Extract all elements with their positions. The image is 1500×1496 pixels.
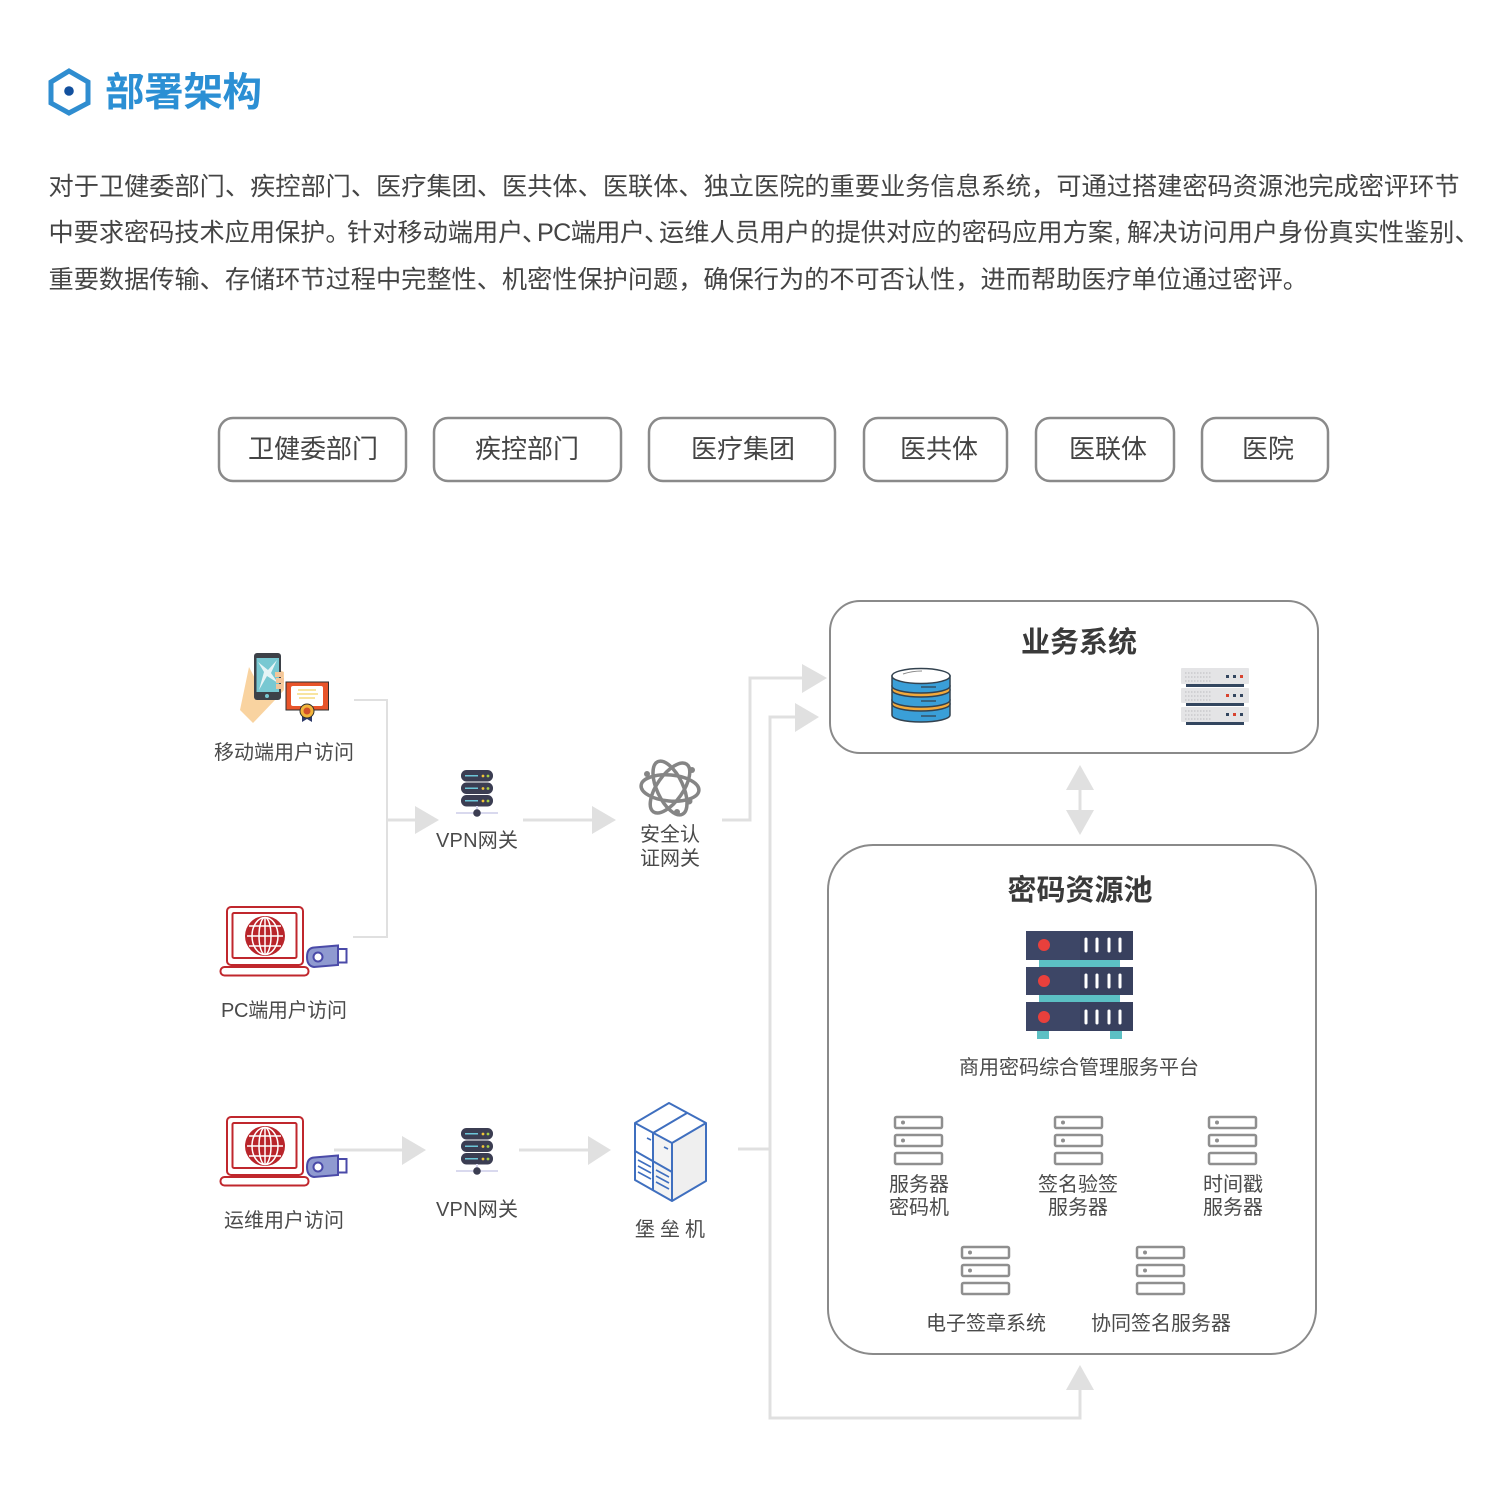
- intro text block: 针对移动端用户: [347, 219, 523, 247]
- label: timestamp server: 服务器: [1203, 1196, 1263, 1219]
- label: signature verification server: 服务器: [1048, 1196, 1108, 1219]
- icon: server crypto machine: [895, 1117, 942, 1164]
- label: VPN gateway bottom: VPN网关: [436, 1198, 518, 1221]
- heading: business system: 业务系统: [1021, 626, 1137, 659]
- tag: 医院: [1202, 418, 1328, 481]
- icon: electronic seal system: [962, 1247, 1009, 1294]
- panel: crypto resource pool: [828, 845, 1316, 1354]
- label: signature verification server: [1038, 1173, 1118, 1219]
- label: VPN gateway top: VPN网关: [436, 829, 518, 852]
- intro text block: 运维人员用户的提供对应的密码应用方案: [659, 219, 1113, 247]
- intro text block: [48, 173, 1480, 294]
- icon: rack server: [1181, 668, 1249, 725]
- tag: 卫健委部门: 卫健委部门: [248, 434, 378, 464]
- intro text block: 、: [644, 219, 669, 247]
- label: security authentication gateway: [640, 823, 700, 870]
- intro text block: PC端用户: [537, 219, 645, 247]
- tag: 医共体: [864, 418, 1007, 481]
- icon: PC user laptop: [220, 907, 346, 976]
- tag: 卫健委部门: [219, 418, 406, 481]
- icon: security authentication gateway atom: [640, 756, 700, 820]
- tag: 医共体: 医共体: [900, 434, 978, 464]
- panel: business system: [830, 601, 1318, 753]
- label: mobile user access: 移动端用户访问: [214, 741, 354, 764]
- intro text block: 解决访问用户身份真实性鉴别、: [1127, 219, 1480, 247]
- icon: bastion host: [635, 1103, 706, 1201]
- label: timestamp server: 时间戳: [1203, 1173, 1263, 1196]
- tag: 医疗集团: 医疗集团: [691, 434, 795, 464]
- tag: 疾控部门: [434, 418, 621, 481]
- label: management platform: 商用密码综合管理服务平台: [959, 1056, 1199, 1079]
- icon: VPN gateway top: [456, 770, 498, 817]
- intro text block: ,: [1114, 219, 1121, 247]
- heading: crypto resource pool: 密码资源池: [1007, 874, 1153, 907]
- icon: database: [892, 668, 950, 722]
- label: security authentication gateway: 证网关: [640, 847, 700, 870]
- arrow: bastion host to business system and crypto pool: [738, 703, 1094, 1418]
- tag: 医院: 医院: [1242, 434, 1294, 464]
- label: server crypto machine: 服务器: [889, 1173, 949, 1196]
- icon: collaborative signature server: [1137, 1247, 1184, 1294]
- icon: ops user laptop: [220, 1117, 346, 1186]
- icon: mobile user: [240, 653, 328, 723]
- icon: signature verification server: [1055, 1117, 1102, 1164]
- arrow: user access to VPN gateway: [353, 700, 439, 937]
- arrow: ops user to VPN gateway: [334, 1136, 426, 1165]
- label: timestamp server: [1203, 1173, 1263, 1219]
- tag: 医联体: [1036, 418, 1174, 481]
- intro text block: 中要求密码技术应用保护。: [48, 219, 350, 247]
- intro text block: 重要数据传输、存储环节过程中完整性、机密性保护问题，确保行为的不可否认性，进而帮助医疗单位通过密评。: [48, 266, 1308, 294]
- arrow: VPN gateway to auth gateway: [523, 806, 616, 834]
- label: bastion host: 堡垒机: [635, 1218, 705, 1241]
- label: collaborative signature server: 协同签名服务器: [1091, 1312, 1231, 1335]
- label: security authentication gateway: 安全认: [640, 823, 700, 846]
- tag: 疾控部门: 疾控部门: [475, 434, 579, 464]
- arrow: auth gateway to business system: [722, 664, 827, 820]
- label: server crypto machine: [889, 1173, 949, 1219]
- tag: 医联体: 医联体: [1069, 434, 1147, 464]
- arrow: bidirectional between systems: [1066, 765, 1094, 835]
- tag: 医疗集团: [649, 418, 835, 481]
- intro text block: 对于卫健委部门、疾控部门、医疗集团、医共体、医联体、独立医院的重要业务信息系统，可通过搭建密码资源池完成密评环节: [48, 173, 1460, 201]
- intro text block: 、: [522, 219, 547, 247]
- label: ops user access: 运维用户访问: [224, 1209, 344, 1232]
- section icon: hexagon: [51, 71, 88, 113]
- label: signature verification server: 签名验签: [1038, 1173, 1118, 1196]
- label: PC user access: PC端用户访问: [221, 999, 347, 1022]
- label: electronic seal system: 电子签章系统: [926, 1312, 1046, 1335]
- arrow: VPN gateway to bastion host: [519, 1136, 611, 1165]
- title: 部署架构: [105, 71, 262, 115]
- icon: timestamp server: [1209, 1117, 1256, 1164]
- label: server crypto machine: 密码机: [889, 1196, 949, 1219]
- icon: management platform server: [1026, 931, 1133, 1039]
- icon: VPN gateway bottom: [456, 1128, 498, 1175]
